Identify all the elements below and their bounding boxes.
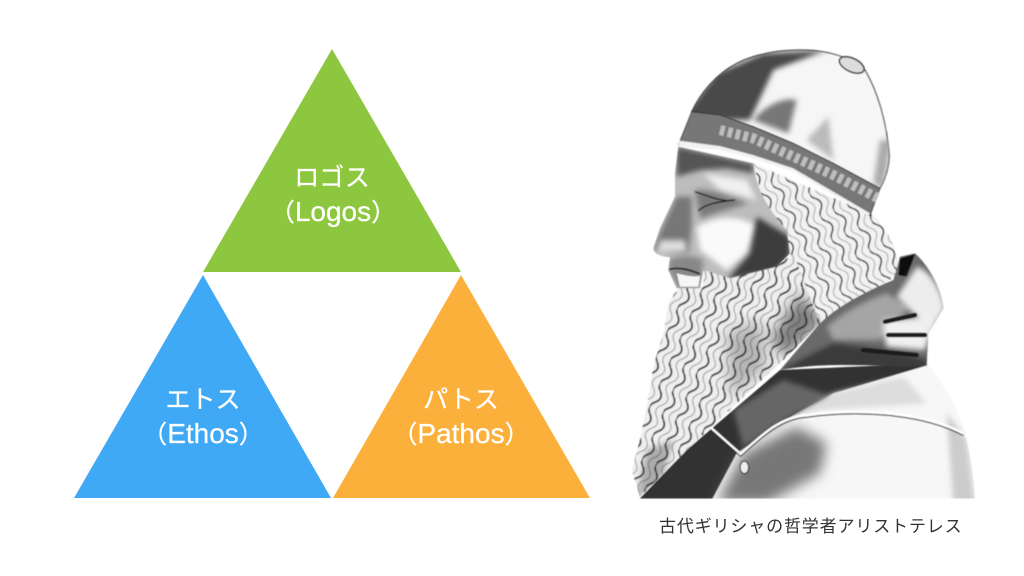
beard [632, 254, 820, 497]
label: Ethos: （Ethos） [142, 418, 264, 449]
label: Pathos: （Pathos） [392, 418, 530, 449]
triangle: Pathos [333, 275, 590, 498]
label: Logos: ロゴス [294, 164, 370, 192]
face [650, 143, 793, 293]
cap band [678, 112, 880, 216]
hair [753, 163, 900, 323]
label: Pathos [392, 386, 530, 449]
caption: 古代ギリシャの哲学者アリストテレス [659, 517, 962, 536]
portrait: Aristotle engraving [620, 50, 987, 507]
cap button [837, 53, 867, 77]
label: Ethos: エトス [165, 386, 241, 414]
triangle: Logos [203, 49, 461, 272]
triangle: Ethos [74, 275, 331, 498]
collar line and pendant [712, 412, 963, 474]
label: Logos [270, 164, 396, 227]
label: Ethos [142, 386, 264, 449]
label: Logos: （Logos） [270, 196, 396, 227]
cap dome [683, 50, 892, 190]
robe shoulder [640, 364, 976, 500]
label: Pathos: パトス [423, 386, 499, 414]
hood fold [777, 250, 947, 373]
